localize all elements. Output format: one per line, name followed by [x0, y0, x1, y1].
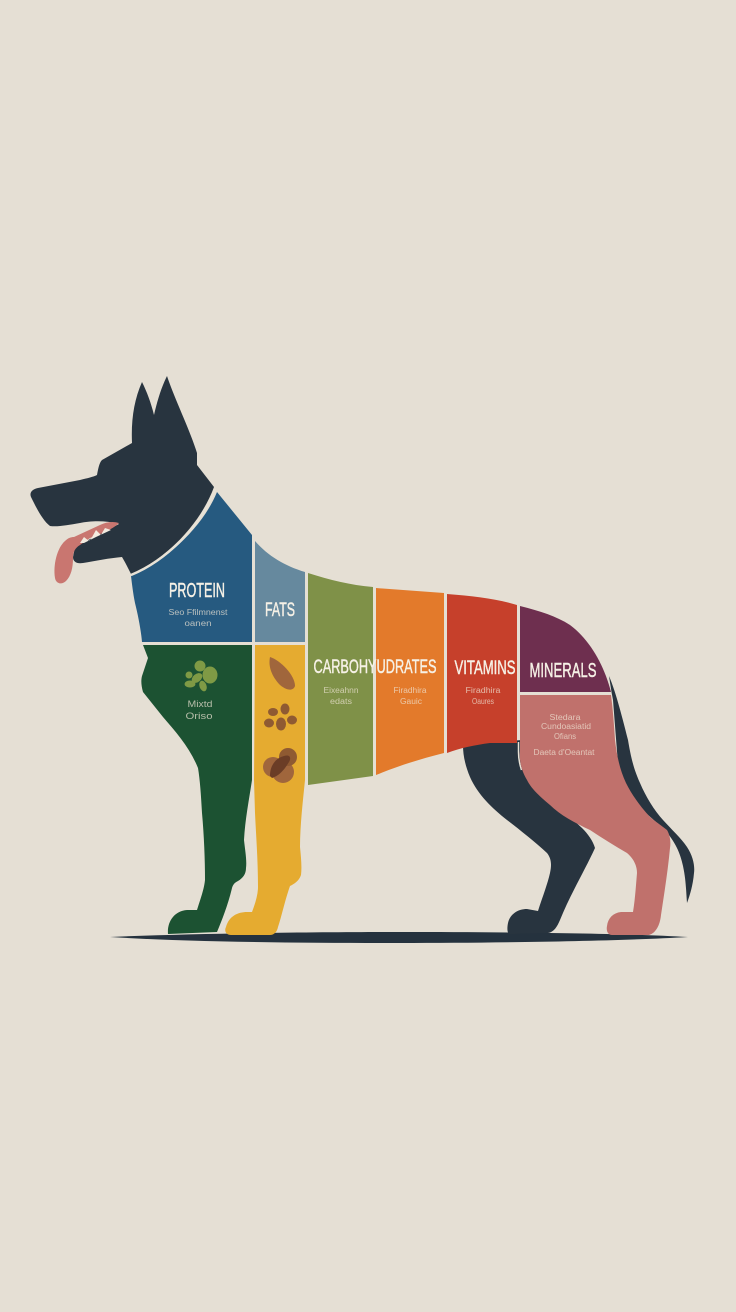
tongue and mouth	[54, 522, 119, 583]
text: vitamins description: Oaures	[472, 697, 494, 706]
tail	[609, 676, 694, 903]
text: vitamins description: Firadhira	[466, 686, 501, 695]
panel: carbohydrates	[308, 573, 373, 785]
text: orange description	[394, 686, 427, 706]
hind leg (dark)	[463, 740, 595, 934]
panel: minerals	[520, 606, 611, 692]
heading: minerals: MINERALS	[530, 660, 596, 682]
heading: protein: PROTEIN	[169, 580, 225, 602]
panel: protein	[131, 492, 252, 642]
text: orange description: Firadhira	[394, 686, 427, 695]
text: green description: Oriso	[186, 711, 212, 721]
panel: fats	[255, 541, 305, 642]
head silhouette	[30, 376, 214, 574]
heading: carbohydrates: CARBOHYUDRATES	[314, 657, 436, 678]
text: carbohydrates description: Eixeahnn	[324, 686, 358, 695]
text: minerals description: Daeta d'Oeantat	[534, 748, 595, 757]
panel: vitamins	[447, 594, 517, 753]
text: green description: Mixtd	[188, 699, 212, 709]
text: protein description: Seo Ffilmnenst	[168, 608, 228, 617]
icon: green cluster	[184, 660, 218, 692]
text: minerals description: Ofians	[554, 732, 576, 741]
text: minerals description: Stedara	[550, 713, 581, 722]
text: minerals description	[534, 713, 595, 757]
panel: yellow leg	[225, 645, 305, 935]
text: protein description	[168, 608, 228, 628]
neck collar line	[131, 489, 215, 575]
icon: almond	[269, 657, 295, 690]
heading: fats: FATS	[265, 600, 295, 621]
text: carbohydrates description: edats	[330, 697, 352, 706]
text: carbohydrates description	[324, 686, 358, 706]
panel: green leg	[141, 645, 252, 934]
icon: seeds	[263, 748, 297, 783]
text: orange description: Gauic	[400, 697, 422, 706]
teeth	[80, 528, 111, 543]
panel: orange	[376, 588, 444, 775]
icon: nuts flower	[264, 704, 297, 730]
ground shadow	[110, 932, 688, 943]
panel: pink hind leg	[518, 695, 670, 935]
text: green description	[186, 699, 212, 721]
text: protein description: oanen	[184, 619, 212, 628]
text: minerals description: Cundoasiatid	[541, 722, 591, 731]
text: vitamins description	[466, 686, 501, 706]
heading: vitamins: VITAMINS	[454, 658, 516, 679]
